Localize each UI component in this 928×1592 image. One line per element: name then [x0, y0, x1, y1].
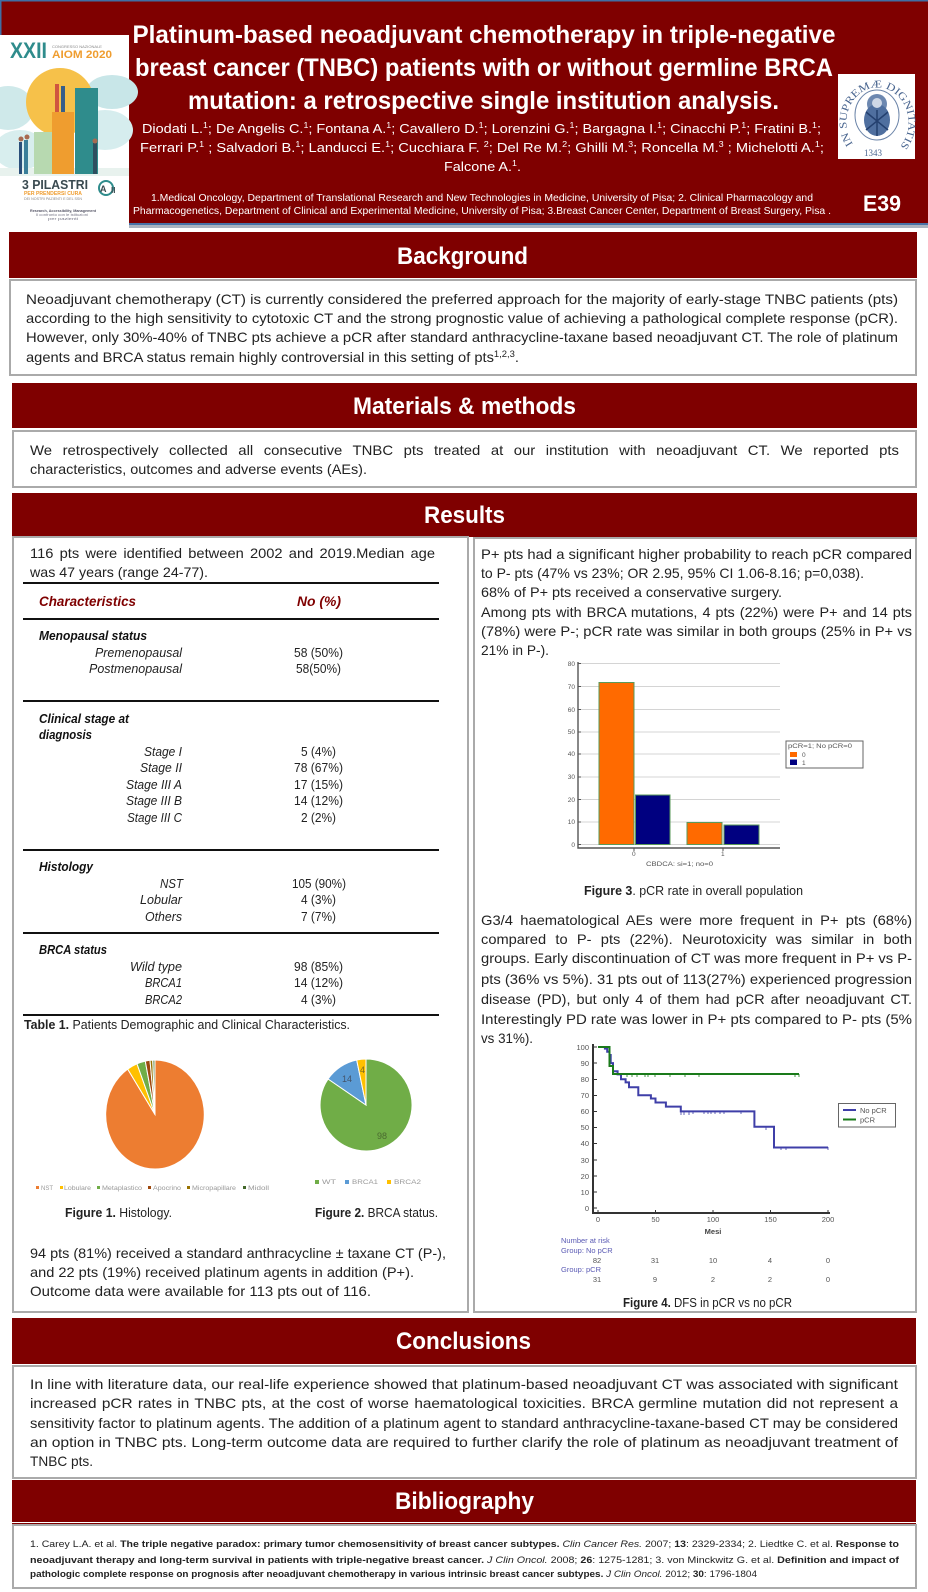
authors: ; Cavallero D.	[391, 121, 479, 136]
legend: histology: Apocrino	[153, 1185, 181, 1192]
pCR results text: 21% in P-).	[481, 642, 549, 658]
bar chart: pCR rate: 40	[568, 751, 575, 758]
bar chart: pCR rate: 70	[568, 684, 575, 691]
icon: congress poster: DEI NOSTRI PAZIENTI E DEL SSN	[24, 197, 82, 201]
authors: ; Salvadori B.	[204, 140, 295, 155]
table: patient characteristics: 5 (4%)	[301, 745, 336, 759]
line chart: DFS Kaplan-Meier: Mesi	[705, 1227, 721, 1236]
line chart: DFS Kaplan-Meier: 60	[581, 1107, 589, 1116]
legend: histology: NST	[41, 1185, 53, 1192]
heading bar: Materials & methods: Materials & methods	[353, 393, 576, 420]
authors: 1	[303, 121, 309, 130]
authors: 1	[479, 121, 484, 130]
legend: DFS	[838, 1104, 896, 1127]
figure 3 caption: Figure 3. pCR rate in overall population	[584, 884, 803, 898]
line chart: DFS Kaplan-Meier: 40	[581, 1139, 589, 1148]
affiliations: Pharmacogenetics, Department of Clinical and Experimental Medicine, University of Pisa; 3.Breast Cancer Center, Department of Breast Surgery, Pisa .	[133, 206, 831, 217]
adverse events text: vs 31%).	[481, 1030, 533, 1046]
authors: 1	[741, 121, 747, 130]
table: patient characteristics: Postmenopausal	[89, 662, 183, 676]
icon: congress poster: per pazienti	[48, 217, 79, 221]
legend: pCR	[786, 741, 863, 768]
icon: congress poster: XXII	[10, 38, 47, 63]
line chart: DFS Kaplan-Meier: 10	[581, 1188, 589, 1197]
panel: background text: Neoadjuvant chemotherapy (CT) is currently considered the preferred approach for the majority of early-stage TNBC patients (pts)	[26, 291, 898, 307]
panel: background text: However, only 30%-40% of TNBC pts achieve a pCR after standard anthracycline-taxane based neoadjuvant CT. The role of platinum	[26, 329, 898, 345]
icon: University of Pisa seal: IN SUPREMÆ DIGNITATIS	[840, 80, 916, 150]
panel: references	[13, 1525, 916, 1588]
bar chart: pCR rate: 20	[568, 797, 575, 804]
panel: references: 1. Carey L.A. et al. The triple negative paradox: primary tumor chemosensitivity of breast cancer subtypes. Clin Cancer Res. 2007; 13: 2329-2334; 2. Liedtke C. et al. Response to	[30, 1539, 899, 1550]
authors: 2	[484, 140, 489, 149]
number at risk table: 31	[651, 1256, 659, 1265]
number at risk table: 82	[593, 1256, 601, 1265]
section: background	[9, 232, 917, 375]
line chart: DFS Kaplan-Meier: 20	[581, 1172, 589, 1181]
authors: ; Fratini B.	[746, 121, 812, 136]
authors: ; Landucci E.	[300, 140, 385, 155]
legend: DFS: pCR	[860, 1116, 876, 1124]
panel: conclusions text: an option in TNBC pts. Long-term outcome data are required to further clarify the role of platinum as neoadjuvant treatment of	[30, 1434, 898, 1450]
adverse events text: groups. Early discontinuation of CT was more frequent in P+ vs P-	[481, 950, 912, 966]
panel: conclusions text: In line with literature data, our real-life experience showed that platinum-based neoadjuvant CT was associated with significant	[30, 1376, 898, 1392]
panel: conclusions text	[13, 1366, 916, 1478]
table: patient characteristics: 14 (12%)	[294, 976, 343, 990]
bar chart: pCR rate: 10	[568, 819, 575, 826]
panel: results left column	[13, 537, 468, 1312]
panel: background text: .	[515, 349, 519, 365]
line chart: DFS Kaplan-Meier: 80	[581, 1075, 589, 1084]
title: Platinum-based neoadjuvant chemotherapy in triple-negative	[132, 21, 836, 49]
figure 1 caption: Figure 1. Histology.	[65, 1206, 172, 1220]
legend: histology: Lobulare	[64, 1185, 91, 1192]
poster code E39: E39	[863, 191, 901, 216]
line chart: DFS Kaplan-Meier: 70	[581, 1091, 589, 1100]
authors: 1	[512, 159, 518, 168]
intro text	[29, 545, 435, 580]
pCR results text: Among pts with BRCA mutations, 4 pts (22%) were P+ and 14 pts	[481, 604, 912, 620]
title: mutation: a retrospective single institution analysis.	[188, 87, 779, 115]
pie chart: BRCA status: 4	[360, 1065, 365, 1075]
panel: references: pathologic complete response on prognosis after neoadjuvant chemotherapy in various intrinsic breast cancer subtypes. J Clin Oncol. 2012; 30: 1796-1804	[30, 1569, 757, 1580]
number at risk table: Group: No pCR	[561, 1246, 613, 1255]
legend: pCR: 1	[802, 760, 806, 767]
icon: congress poster: Research, Accessibility, Management	[30, 209, 97, 213]
legend: BRCA status: WT	[322, 1179, 336, 1186]
adverse events text: disease (PD), but only 4 of them had pCR after neoadjuvant CT.	[481, 991, 912, 1007]
bar chart: pCR rate: 0	[632, 851, 636, 858]
table: patient characteristics: 4 (3%)	[301, 893, 336, 907]
legend: BRCA status	[315, 1179, 421, 1186]
legend: BRCA status: BRCA1	[352, 1179, 378, 1186]
affiliations	[133, 193, 831, 217]
table: patient characteristics: No (%)	[297, 593, 341, 609]
bar chart: pCR rate: 1	[721, 851, 725, 858]
table: patient characteristics: Stage I	[144, 745, 182, 759]
title: breast cancer (TNBC) patients with or without germline BRCA	[135, 54, 833, 82]
table: patient characteristics: Menopausal status	[39, 629, 147, 643]
figure 2 caption: Figure 2. BRCA status.	[315, 1206, 438, 1220]
table: patient characteristics: 58(50%)	[296, 662, 341, 676]
table: patient characteristics: Clinical stage at	[39, 712, 130, 726]
adverse events text: G3/4 haematological AEs were more frequent in P+ pts (68%)	[481, 912, 912, 928]
heading bar: Background	[9, 232, 917, 278]
treatment text: 94 pts (81%) received a standard anthracycline ± taxane CT (P-),	[30, 1245, 446, 1261]
section: materials and methods	[12, 383, 917, 487]
table: patient characteristics: 78 (67%)	[294, 761, 343, 775]
table caption: Table 1. Patients Demographic and Clinical Characteristics.	[24, 1018, 350, 1032]
icon: congress poster: II	[111, 186, 115, 195]
authors: 1	[203, 121, 209, 130]
table: patient characteristics	[23, 582, 439, 1016]
number at risk table: 2	[711, 1275, 715, 1284]
line chart: DFS Kaplan-Meier: 90	[581, 1059, 589, 1068]
bar chart: pCR rate: 30	[568, 774, 575, 781]
authors: ; Bargagna I.	[574, 121, 657, 136]
table: patient characteristics: 98 (85%)	[294, 960, 343, 974]
authors: ; Ghilli M.	[567, 140, 628, 155]
line chart: DFS Kaplan-Meier: 200	[822, 1215, 834, 1224]
authors: Diodati L.	[142, 121, 197, 136]
authors: ; Lorenzini G.	[484, 121, 570, 136]
panel: conclusions text: TNBC pts.	[30, 1453, 93, 1469]
icon: congress poster	[0, 35, 138, 226]
authors: 1	[657, 121, 663, 130]
table: patient characteristics: Stage III C	[127, 811, 183, 825]
authors: 3	[628, 140, 634, 149]
panel: background text: according to the high sensitivity to cytotoxic CT and the strong prognostic value of achieving a pathological complete response (pCR).	[26, 310, 898, 326]
heading bar: Conclusions	[12, 1318, 916, 1364]
icon: University of Pisa seal: 1343	[864, 148, 882, 158]
pie chart: BRCA status: 14	[342, 1074, 352, 1084]
affiliations: 1.Medical Oncology, Department of Translational Research and New Technologies in Medicine, University of Pisa; 2. Clinical Pharmacology and	[151, 193, 813, 204]
number at risk table: 4	[768, 1256, 772, 1265]
authors: 1	[199, 140, 205, 149]
table: patient characteristics: 7 (7%)	[301, 910, 336, 924]
authors: 1	[812, 121, 818, 130]
bar chart: pCR rate: 60	[568, 707, 575, 714]
legend: histology: Micropapillare	[192, 1185, 236, 1192]
authors: 1	[386, 121, 392, 130]
heading bar: Materials & methods	[12, 383, 917, 428]
pie chart: histology	[36, 1060, 270, 1192]
authors: ; Cucchiara F.	[390, 140, 484, 155]
figure 4 caption: Figure 4. DFS in pCR vs no pCR	[623, 1296, 792, 1310]
authors: Falcone A.	[444, 159, 505, 174]
table: patient characteristics: 4 (3%)	[301, 993, 336, 1007]
panel: results right column	[474, 538, 916, 1312]
number at risk table: Group: pCR	[561, 1265, 602, 1274]
number at risk table: 0	[826, 1256, 830, 1265]
authors: 1	[295, 140, 301, 149]
authors	[140, 121, 824, 174]
title	[132, 21, 836, 115]
line chart: DFS Kaplan-Meier: 0	[585, 1204, 589, 1213]
table: patient characteristics: 17 (15%)	[294, 778, 343, 792]
table: patient characteristics: Premenopausal	[95, 646, 183, 660]
pCR results text: 68% of P+ pts received a conservative surgery.	[481, 584, 782, 600]
line chart: DFS Kaplan-Meier: 100	[576, 1043, 589, 1052]
heading bar: Results	[12, 493, 917, 537]
table: patient characteristics: Stage III A	[126, 778, 182, 792]
number at risk table: 2	[768, 1275, 772, 1284]
pCR results text: to P- pts (47% vs 23%; OR 2.95, 95% CI 1.06-8.16; p=0,038).	[481, 565, 864, 581]
authors: 2	[562, 140, 568, 149]
bar chart: pCR rate: 80	[568, 661, 575, 668]
table: patient characteristics: BRCA status	[39, 943, 107, 957]
authors: ; Del Re M.	[489, 140, 562, 155]
table: patient characteristics: Histology	[39, 860, 94, 874]
table: patient characteristics: Lobular	[140, 893, 183, 907]
authors: ; Cinacchi P.	[662, 121, 741, 136]
heading bar: Results: Results	[424, 502, 505, 529]
number at risk table: 9	[653, 1275, 657, 1284]
icon: congress poster: Il confronto con le istituzioni	[36, 213, 88, 217]
icon: congress poster: A	[100, 184, 107, 194]
panel: background text: 1,2,3	[494, 349, 515, 359]
panel: conclusions text: sensitivity factor to platinum agents. The addition of a platinum agent to standard anthracycline-taxane-based CT may be considered	[30, 1415, 898, 1431]
panel: methods text	[13, 431, 916, 487]
panel: methods text: We retrospectively collected all consecutive TNBC pts treated at our institution with neoadjuvant CT. We reported pts	[30, 442, 899, 458]
section: conclusions	[12, 1318, 916, 1478]
pie chart: BRCA status: 98	[377, 1131, 387, 1141]
bar chart: pCR rate	[568, 661, 863, 868]
icon: congress poster: 3 PILASTRI	[22, 177, 88, 192]
table: patient characteristics: BRCA1	[145, 976, 182, 990]
legend: pCR: 0	[802, 752, 806, 759]
table: patient characteristics: Wild type	[130, 960, 182, 974]
authors: ; De Angelis C.	[208, 121, 303, 136]
authors: ; Roncella M.	[633, 140, 719, 155]
number at risk table	[561, 1236, 830, 1284]
authors: ;	[817, 121, 821, 136]
heading bar: Bibliography: Bibliography	[395, 1488, 535, 1515]
line chart: DFS Kaplan-Meier: 50	[581, 1123, 589, 1132]
number at risk table: 31	[593, 1275, 601, 1284]
panel: methods text: characteristics, outcomes and adverse events (AEs).	[30, 461, 367, 477]
panel: background text	[10, 280, 916, 375]
adverse events text: Interestingly PD rate was lower in P+ pts compared to P- pts (5%	[481, 1011, 912, 1027]
bar chart: pCR rate: 50	[568, 729, 575, 736]
section: bibliography	[12, 1480, 916, 1588]
panel: background text: agents and BRCA status remain highly controversial in this setting of pts	[26, 349, 473, 365]
table: patient characteristics: 58 (50%)	[294, 646, 343, 660]
curve: no pCR	[598, 1047, 828, 1150]
treatment text	[30, 1245, 446, 1299]
table: patient characteristics: 14 (12%)	[294, 794, 343, 808]
heading bar: Conclusions: Conclusions	[396, 1328, 531, 1355]
table: patient characteristics: 105 (90%)	[292, 877, 346, 891]
authors: Ferrari P.	[140, 140, 192, 155]
line chart: DFS Kaplan-Meier: 30	[581, 1156, 589, 1165]
authors: ; Michelotti A.	[724, 140, 815, 155]
icon: congress poster: PER PRENDERSI CURA	[24, 191, 82, 197]
authors: 1	[385, 140, 391, 149]
line chart: DFS Kaplan-Meier: 100	[707, 1215, 719, 1224]
table: patient characteristics: NST	[160, 877, 184, 891]
adverse events text: pts (36% vs 5%). 31 pts out of 113(27%) experienced progression	[481, 971, 912, 987]
curve: pCR	[598, 1047, 799, 1077]
adverse events text	[481, 912, 912, 1046]
line chart: DFS Kaplan-Meier: 150	[764, 1215, 777, 1224]
legend: histology: Midoll	[248, 1185, 270, 1192]
bar chart: pCR rate: CBDCA: si=1; no=0	[646, 861, 713, 868]
intro text: 116 pts were identified between 2002 and 2019.Median age	[30, 545, 435, 561]
heading bar: Bibliography	[12, 1480, 916, 1524]
line chart: DFS Kaplan-Meier: 50	[651, 1215, 660, 1224]
bar chart: pCR rate: 0	[571, 842, 575, 849]
pie chart: BRCA status	[315, 1059, 421, 1186]
line chart: DFS Kaplan-Meier	[561, 1043, 896, 1284]
table: patient characteristics: 2 (2%)	[301, 811, 336, 825]
authors: 1	[815, 140, 821, 149]
panel: references: neoadjuvant therapy and long-term survival in patients with triple-negative breast cancer. J Clin Oncol. 2008; 26: 1275-1281; 3. von Minckwitz G. et al. Definition and impact of	[30, 1555, 900, 1566]
table: patient characteristics: diagnosis	[39, 728, 92, 742]
legend: histology: Metaplastico	[102, 1185, 142, 1192]
pCR results text: P+ pts had a significant higher probability to reach pCR compared	[481, 546, 912, 562]
treatment text: and 22 pts (19%) received platinum agents in addition (P+).	[30, 1264, 414, 1280]
treatment text: Outcome data were available for 113 pts out of 116.	[30, 1283, 371, 1299]
authors: ; Fontana A.	[308, 121, 386, 136]
panel: conclusions text: increased pCR rates in TNBC pts, at the cost of worse haematological toxicities. BRCA germline mutation did not represent a	[30, 1395, 898, 1411]
legend: pCR: pCR=1; No pCR=0	[788, 743, 852, 750]
authors: 3	[719, 140, 724, 149]
authors: .	[517, 159, 521, 174]
number at risk table: Number at risk	[561, 1236, 610, 1245]
pCR results text: (78%) were P-; pCR rate was similar in both groups (25% in P+ vs	[481, 623, 912, 639]
icon: congress poster: AIOM 2020	[52, 49, 112, 61]
table: patient characteristics: Others	[145, 910, 182, 924]
pCR results text	[481, 546, 912, 658]
table: patient characteristics: Characteristics	[39, 593, 136, 609]
adverse events text: compared to P- pts (22%). Neurotoxicity was similar in both	[481, 931, 912, 947]
authors: 1	[570, 121, 575, 130]
number at risk table: 0	[826, 1275, 830, 1284]
legend: DFS: No pCR	[860, 1106, 887, 1115]
legend: histology	[36, 1185, 270, 1192]
line chart: DFS Kaplan-Meier: 0	[596, 1215, 600, 1224]
legend: BRCA status: BRCA2	[394, 1179, 421, 1186]
authors: ;	[820, 140, 824, 155]
table: patient characteristics: Stage III B	[126, 794, 182, 808]
number at risk table: 10	[709, 1256, 717, 1265]
intro text: was 47 years (range 24-77).	[29, 564, 208, 580]
icon: congress poster: CONGRESSO NAZIONALE	[52, 44, 102, 49]
header banner	[0, 0, 928, 228]
table: patient characteristics: BRCA2	[145, 993, 182, 1007]
table: patient characteristics: Stage II	[140, 761, 183, 775]
heading bar: Background: Background	[397, 243, 528, 270]
